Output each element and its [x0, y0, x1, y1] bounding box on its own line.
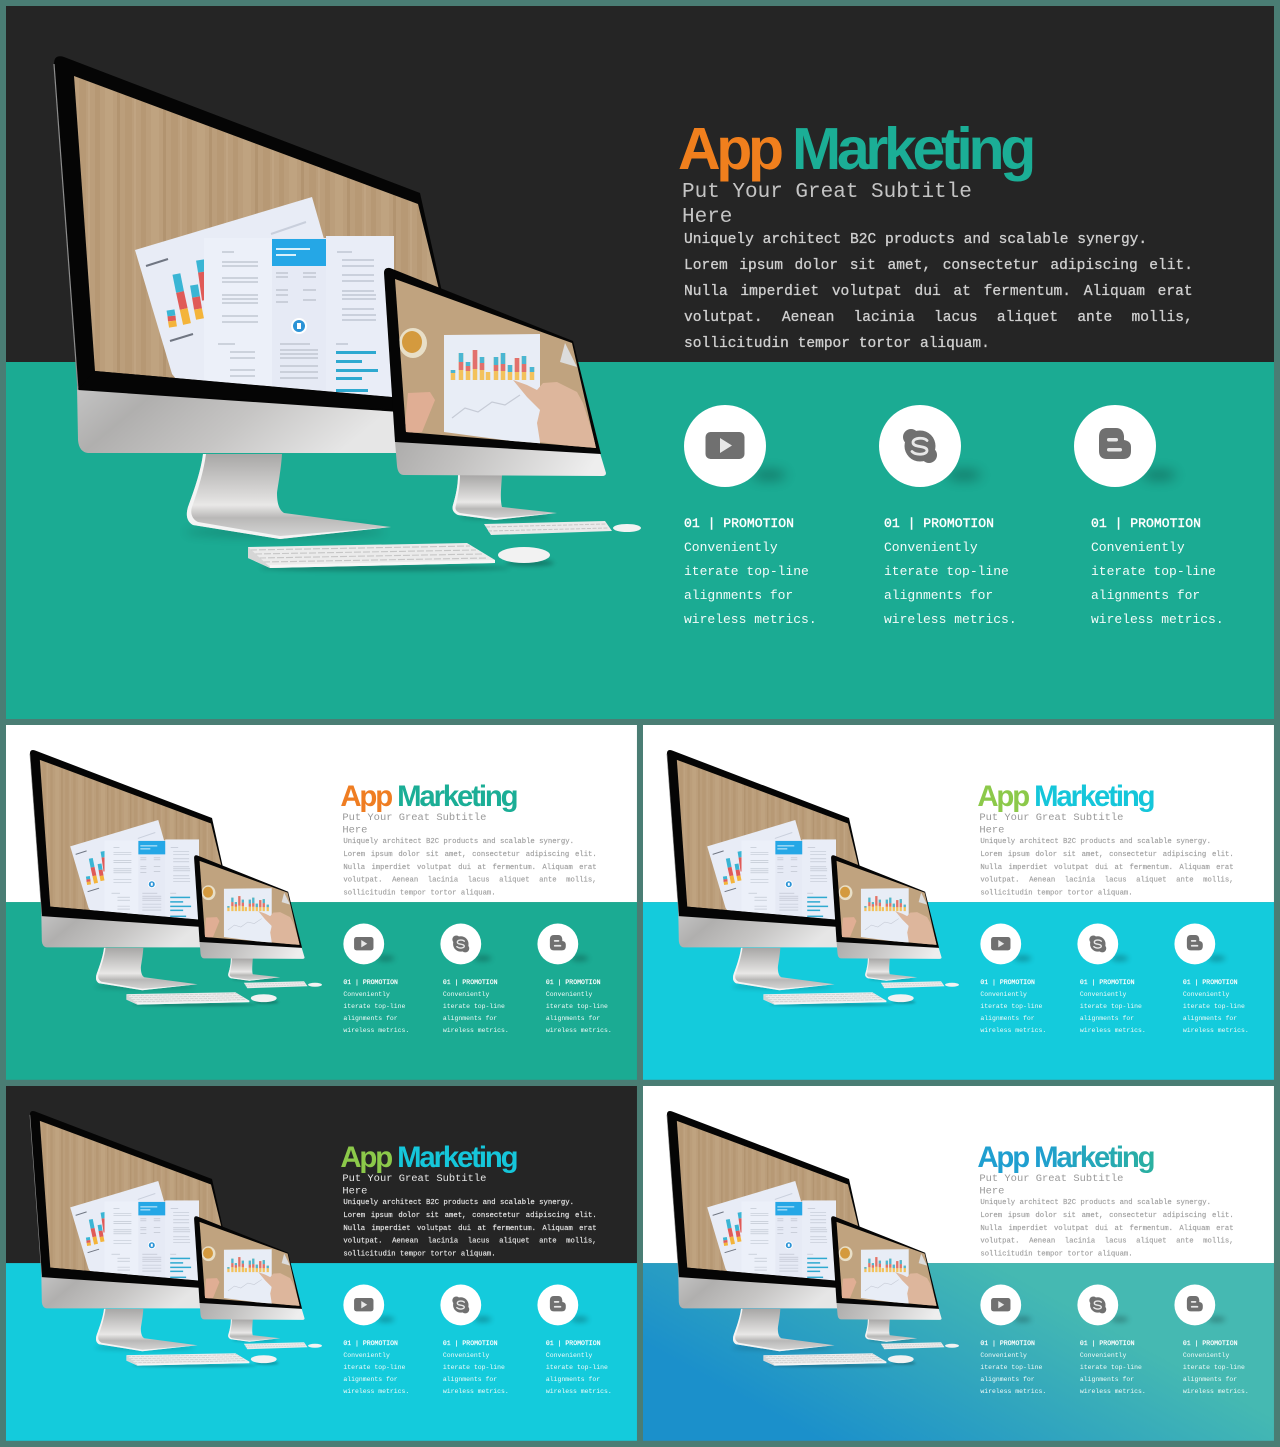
- promotion column 1: [980, 1340, 1046, 1395]
- icon: video play: [980, 924, 1031, 964]
- promotion column 1: alignments for: [684, 588, 793, 603]
- promotion column 3: 01 | PROMOTION: [546, 979, 601, 986]
- subtitle: Here: [342, 1185, 367, 1197]
- promotion column 2: 01 | PROMOTION: [1080, 1340, 1135, 1347]
- monitors mockup: [667, 1111, 959, 1367]
- promotion column 2: wireless metrics.: [1080, 1388, 1146, 1395]
- promotion column 3: wireless metrics.: [1183, 1027, 1249, 1034]
- slide background: [6, 6, 1274, 719]
- slide background: [6, 1086, 637, 1441]
- icon: blogger: [1174, 1285, 1225, 1325]
- promotion column 1: Conveniently: [980, 1352, 1027, 1359]
- promotion column 3: alignments for: [1091, 588, 1200, 603]
- promotion column 2: 01 | PROMOTION: [443, 1340, 498, 1347]
- icon: video play: [343, 1285, 394, 1325]
- body text: Lorem ipsum dolor sit amet, consectetur adipiscing elit.: [980, 851, 1234, 859]
- promotion column 3: alignments for: [546, 1376, 600, 1383]
- promotion column 1: alignments for: [343, 1015, 398, 1022]
- subtitle: [682, 181, 972, 229]
- promotion column 2: 01 | PROMOTION: [884, 516, 994, 531]
- promotion column 1: wireless metrics.: [980, 1388, 1046, 1395]
- promotion column 3: iterate top-line: [1091, 564, 1216, 579]
- subtitle: Here: [342, 824, 367, 836]
- promotion column 2: iterate top-line: [884, 564, 1009, 579]
- promotion column 3: Conveniently: [1183, 1352, 1229, 1359]
- promotion column 3: alignments for: [1183, 1015, 1237, 1022]
- body text: Uniquely architect B2C products and scalable synergy.: [684, 232, 1147, 248]
- icon: video play: [980, 1285, 1031, 1325]
- body text: [980, 838, 1234, 898]
- body text: [980, 1199, 1234, 1259]
- promotion column 3: alignments for: [546, 1015, 600, 1022]
- promotion column 3: [546, 979, 612, 1034]
- title: App: [977, 780, 1029, 813]
- icon: video play: [684, 405, 786, 487]
- promotion column 1: 01 | PROMOTION: [343, 1340, 398, 1347]
- body text: Lorem ipsum dolor sit amet, consectetur adipiscing elit.: [980, 1212, 1234, 1220]
- promotion column 2: alignments for: [1080, 1376, 1134, 1383]
- promotion column 1: Conveniently: [980, 991, 1027, 998]
- promotion column 2: iterate top-line: [1080, 1364, 1142, 1371]
- slide background: [643, 1086, 1274, 1441]
- subtitle: Here: [682, 206, 732, 229]
- slide background: [6, 725, 637, 1080]
- body text: volutpat. Aenean lacinia lacus aliquet ante mollis,: [980, 877, 1234, 885]
- promotion column 3: Conveniently: [546, 991, 592, 998]
- promotion column 2: wireless metrics.: [1080, 1027, 1146, 1034]
- body text: sollicitudin tempor tortor aliquam.: [343, 1251, 496, 1259]
- subtitle: Put Your Great Subtitle: [342, 1173, 486, 1185]
- body text: sollicitudin tempor tortor aliquam.: [980, 1251, 1133, 1259]
- slide background: [643, 725, 1274, 1080]
- body text: Nulla imperdiet volutpat dui at fermentum. Aliquam erat: [980, 1225, 1234, 1233]
- title: App: [678, 116, 782, 182]
- monitors mockup: [30, 1111, 322, 1367]
- title: Marketing: [792, 116, 1033, 182]
- promotion column 3: wireless metrics.: [1183, 1388, 1249, 1395]
- promotion column 3: iterate top-line: [1183, 1003, 1245, 1010]
- icon: skype: [440, 924, 491, 964]
- promotion column 1: wireless metrics.: [684, 612, 817, 627]
- body text: [343, 1199, 597, 1259]
- title: Marketing: [1034, 1141, 1154, 1174]
- panel: dark and cyan slide: [6, 1086, 637, 1441]
- panel: white and cyan slide: [643, 725, 1274, 1080]
- promotion column 1: alignments for: [980, 1376, 1035, 1383]
- promotion column 1: [980, 979, 1046, 1034]
- subtitle: Here: [979, 824, 1004, 836]
- promotion column 2: [1080, 979, 1146, 1034]
- icon: skype: [879, 405, 981, 487]
- promotion column 1: [684, 516, 817, 627]
- body text: volutpat. Aenean lacinia lacus aliquet ante mollis,: [343, 877, 597, 885]
- title: Marketing: [1034, 780, 1154, 813]
- promotion column 1: iterate top-line: [980, 1364, 1042, 1371]
- icon: blogger: [1074, 405, 1176, 487]
- promotion column 3: Conveniently: [1091, 540, 1185, 555]
- body text: Uniquely architect B2C products and scalable synergy.: [980, 838, 1211, 846]
- promotion column 3: [1183, 1340, 1249, 1395]
- promotion column 1: alignments for: [980, 1015, 1035, 1022]
- title: App: [977, 1141, 1029, 1174]
- promotion column 2: alignments for: [884, 588, 993, 603]
- promotion column 3: wireless metrics.: [546, 1027, 612, 1034]
- promotion column 3: iterate top-line: [546, 1364, 608, 1371]
- promotion column 3: wireless metrics.: [1091, 612, 1224, 627]
- promotion column 1: iterate top-line: [343, 1003, 405, 1010]
- promotion column 1: 01 | PROMOTION: [980, 979, 1035, 986]
- icon: blogger: [537, 924, 588, 964]
- promotion column 2: Conveniently: [884, 540, 978, 555]
- promotion column 3: iterate top-line: [546, 1003, 608, 1010]
- promotion column 3: iterate top-line: [1183, 1364, 1245, 1371]
- promotion column 1: 01 | PROMOTION: [343, 979, 398, 986]
- promotion column 2: Conveniently: [1080, 1352, 1126, 1359]
- body text: sollicitudin tempor tortor aliquam.: [343, 890, 496, 898]
- promotion column 1: iterate top-line: [684, 564, 809, 579]
- promotion column 1: Conveniently: [343, 991, 390, 998]
- promotion column 2: alignments for: [1080, 1015, 1134, 1022]
- body text: Lorem ipsum dolor sit amet, consectetur adipiscing elit.: [343, 851, 597, 859]
- subtitle: Put Your Great Subtitle: [682, 181, 972, 204]
- panel: main slide dark and teal: [6, 6, 1274, 719]
- promotion column 3: wireless metrics.: [546, 1388, 612, 1395]
- body text: [343, 838, 597, 898]
- promotion column 1: Conveniently: [343, 1352, 390, 1359]
- body text: sollicitudin tempor tortor aliquam.: [980, 890, 1133, 898]
- promotion column 2: Conveniently: [1080, 991, 1126, 998]
- promotion column 3: 01 | PROMOTION: [546, 1340, 601, 1347]
- title: [977, 1141, 1154, 1174]
- body text: Nulla imperdiet volutpat dui at fermentum. Aliquam erat: [343, 864, 597, 872]
- title: App: [340, 780, 392, 813]
- title: [977, 780, 1154, 813]
- icon: skype: [440, 1285, 491, 1325]
- promotion column 3: 01 | PROMOTION: [1183, 979, 1238, 986]
- body text: [684, 232, 1193, 352]
- body text: sollicitudin tempor tortor aliquam.: [684, 336, 990, 352]
- promotion column 2: 01 | PROMOTION: [443, 979, 498, 986]
- promotion column 1: Conveniently: [684, 540, 778, 555]
- body text: Uniquely architect B2C products and scalable synergy.: [343, 838, 574, 846]
- promotion column 2: iterate top-line: [443, 1003, 505, 1010]
- body text: volutpat. Aenean lacinia lacus aliquet ante mollis,: [684, 310, 1193, 326]
- promotion column 1: alignments for: [343, 1376, 398, 1383]
- monitors mockup: [54, 56, 641, 571]
- promotion column 2: iterate top-line: [443, 1364, 505, 1371]
- promotion column 1: 01 | PROMOTION: [684, 516, 794, 531]
- promotion column 2: [443, 1340, 509, 1395]
- promotion column 2: wireless metrics.: [443, 1388, 509, 1395]
- promotion column 3: 01 | PROMOTION: [1183, 1340, 1238, 1347]
- title: [340, 780, 517, 813]
- promotion column 1: wireless metrics.: [980, 1027, 1046, 1034]
- subtitle: Put Your Great Subtitle: [979, 1173, 1123, 1185]
- icon: skype: [1077, 924, 1128, 964]
- body text: Nulla imperdiet volutpat dui at fermentum. Aliquam erat: [343, 1225, 597, 1233]
- icon: blogger: [1174, 924, 1225, 964]
- subtitle: Put Your Great Subtitle: [342, 812, 486, 824]
- body text: Lorem ipsum dolor sit amet, consectetur adipiscing elit.: [684, 258, 1193, 274]
- title: [340, 1141, 517, 1174]
- body text: Uniquely architect B2C products and scalable synergy.: [343, 1199, 574, 1207]
- icon: video play: [343, 924, 394, 964]
- promotion column 1: iterate top-line: [343, 1364, 405, 1371]
- monitors mockup: [667, 750, 959, 1006]
- promotion column 1: [343, 979, 409, 1034]
- promotion column 1: [343, 1340, 409, 1395]
- body text: Lorem ipsum dolor sit amet, consectetur adipiscing elit.: [343, 1212, 597, 1220]
- promotion column 2: alignments for: [443, 1376, 497, 1383]
- title: Marketing: [397, 1141, 517, 1174]
- subtitle: [342, 812, 486, 836]
- monitors mockup: [30, 750, 322, 1006]
- body text: Uniquely architect B2C products and scalable synergy.: [980, 1199, 1211, 1207]
- subtitle: [979, 1173, 1123, 1197]
- subtitle: [342, 1173, 486, 1197]
- body text: volutpat. Aenean lacinia lacus aliquet ante mollis,: [343, 1238, 597, 1246]
- promotion column 2: wireless metrics.: [884, 612, 1017, 627]
- promotion column 3: [1091, 516, 1224, 627]
- promotion column 1: iterate top-line: [980, 1003, 1042, 1010]
- promotion column 3: 01 | PROMOTION: [1091, 516, 1201, 531]
- promotion column 3: alignments for: [1183, 1376, 1237, 1383]
- promotion column 3: [546, 1340, 612, 1395]
- icon: skype: [1077, 1285, 1128, 1325]
- promotion column 2: [884, 516, 1017, 627]
- title: App: [340, 1141, 392, 1174]
- promotion column 3: Conveniently: [1183, 991, 1229, 998]
- promotion column 1: wireless metrics.: [343, 1027, 409, 1034]
- subtitle: Put Your Great Subtitle: [979, 812, 1123, 824]
- panel: white and gradient blue slide: [643, 1086, 1274, 1441]
- promotion column 2: Conveniently: [443, 1352, 489, 1359]
- body text: volutpat. Aenean lacinia lacus aliquet ante mollis,: [980, 1238, 1234, 1246]
- promotion column 1: 01 | PROMOTION: [980, 1340, 1035, 1347]
- promotion column 3: [1183, 979, 1249, 1034]
- promotion column 2: iterate top-line: [1080, 1003, 1142, 1010]
- promotion column 2: Conveniently: [443, 991, 489, 998]
- promotion column 3: Conveniently: [546, 1352, 592, 1359]
- promotion column 2: [443, 979, 509, 1034]
- icon: blogger: [537, 1285, 588, 1325]
- panel: white and teal slide: [6, 725, 637, 1080]
- subtitle: Here: [979, 1185, 1004, 1197]
- promotion column 2: alignments for: [443, 1015, 497, 1022]
- promotion column 2: [1080, 1340, 1146, 1395]
- promotion column 2: 01 | PROMOTION: [1080, 979, 1135, 986]
- promotion column 1: wireless metrics.: [343, 1388, 409, 1395]
- title: Marketing: [397, 780, 517, 813]
- title: [678, 116, 1033, 182]
- body text: Nulla imperdiet volutpat dui at fermentum. Aliquam erat: [980, 864, 1234, 872]
- promotion column 2: wireless metrics.: [443, 1027, 509, 1034]
- subtitle: [979, 812, 1123, 836]
- body text: Nulla imperdiet volutpat dui at fermentum. Aliquam erat: [684, 284, 1193, 300]
